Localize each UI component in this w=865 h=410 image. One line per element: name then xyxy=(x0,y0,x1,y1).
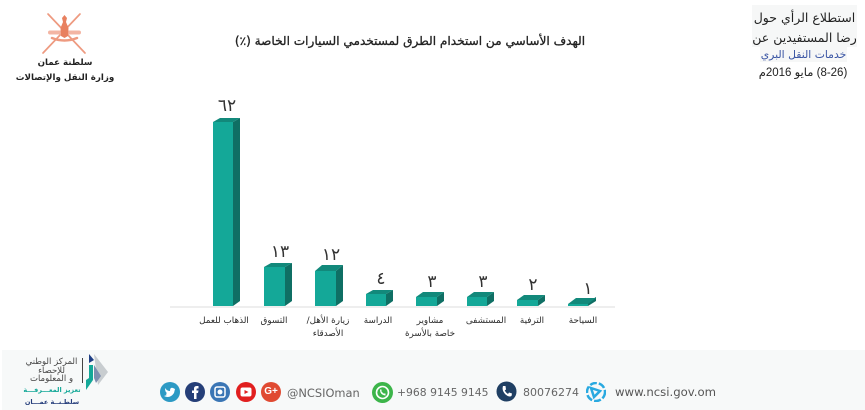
value labels: ٦٢ xyxy=(218,96,236,116)
value labels: ١٢ xyxy=(322,245,340,265)
value labels: ٢ xyxy=(528,275,538,295)
icon: whatsapp xyxy=(372,382,393,403)
website: www.ncsi.gov.om xyxy=(615,385,716,399)
title: الهدف الأساسي من استخدام الطرق لمستخدمي السيارات الخاصة (٪) xyxy=(235,34,585,48)
icon: youtube xyxy=(236,382,256,402)
NCSI tagline xyxy=(23,386,81,406)
ministry name: وزارة النقل والإتصالات xyxy=(16,72,114,82)
survey title: استطلاع الرأي حول xyxy=(754,10,855,25)
icon: phone xyxy=(496,382,516,402)
value labels: ١٣ xyxy=(271,242,289,262)
category labels: زيارة الأهل/ xyxy=(307,316,349,326)
value labels: ٣ xyxy=(427,272,437,292)
bar: tourism 1 xyxy=(568,297,596,306)
NCSI name: للإحصاء xyxy=(38,366,65,376)
NCSI name: المركز الوطني xyxy=(26,357,77,367)
survey title xyxy=(752,5,857,47)
value labels: ١ xyxy=(583,279,593,299)
bar: family errands 3 xyxy=(416,292,444,306)
value labels: ٤ xyxy=(376,269,386,289)
category labels: السياحة xyxy=(569,316,597,326)
value labels: ٣ xyxy=(478,272,488,292)
bar: shopping 13 xyxy=(264,263,292,306)
icon: google plus xyxy=(261,382,281,402)
twitter handle: @NCSIOman xyxy=(287,386,360,400)
category labels: الأصدقاء xyxy=(313,329,343,339)
social media icons xyxy=(160,382,281,402)
category labels: التسوق xyxy=(260,316,288,326)
bar: study 4 xyxy=(366,290,393,306)
category labels: المستشفى xyxy=(466,316,506,326)
value labels xyxy=(218,96,593,299)
NCSI tagline: تعزيز المعـــرفـــة xyxy=(23,386,81,394)
ministry name: سلطنة عمان xyxy=(38,58,92,68)
category labels: الذهاب للعمل xyxy=(199,316,249,326)
icon: google plus: G+ xyxy=(264,386,278,397)
bar: visiting 12 xyxy=(315,265,343,306)
bar: leisure 2 xyxy=(517,295,545,306)
bar: hospital 3 xyxy=(467,292,494,306)
category labels xyxy=(199,314,597,339)
bar chart xyxy=(170,118,615,308)
icon: facebook xyxy=(185,382,205,402)
bar: work 62 xyxy=(213,118,240,306)
category labels: الدراسة xyxy=(364,316,392,326)
icon: instagram xyxy=(210,382,230,402)
survey date: (8-26) مايو 2016م xyxy=(759,67,847,79)
survey title: رضا المستفيدين عن xyxy=(752,30,857,45)
NCSI name xyxy=(22,358,83,383)
category labels: الترفية xyxy=(520,316,544,326)
whatsapp number: +968 9145 9145 xyxy=(397,386,488,399)
icon: Oman national emblem xyxy=(42,13,86,54)
icon: globe xyxy=(586,382,606,402)
ministry name xyxy=(16,58,114,82)
category labels: مشاوير xyxy=(417,316,443,326)
survey subtitle: خدمات النقل البري xyxy=(761,48,846,61)
NCSI tagline: سلطـنــة عمـــان xyxy=(25,398,79,406)
icon: NCSI mark xyxy=(86,354,108,390)
icon: twitter xyxy=(160,382,180,402)
category labels: خاصة بالأسرة xyxy=(405,329,455,339)
emblem and ministry block xyxy=(16,13,114,82)
NCSI name: و المعلومات xyxy=(30,374,73,384)
survey heading block xyxy=(752,5,857,79)
NCSI logo xyxy=(23,354,108,406)
footer band xyxy=(2,350,865,410)
toll free number: 80076274 xyxy=(523,386,579,399)
